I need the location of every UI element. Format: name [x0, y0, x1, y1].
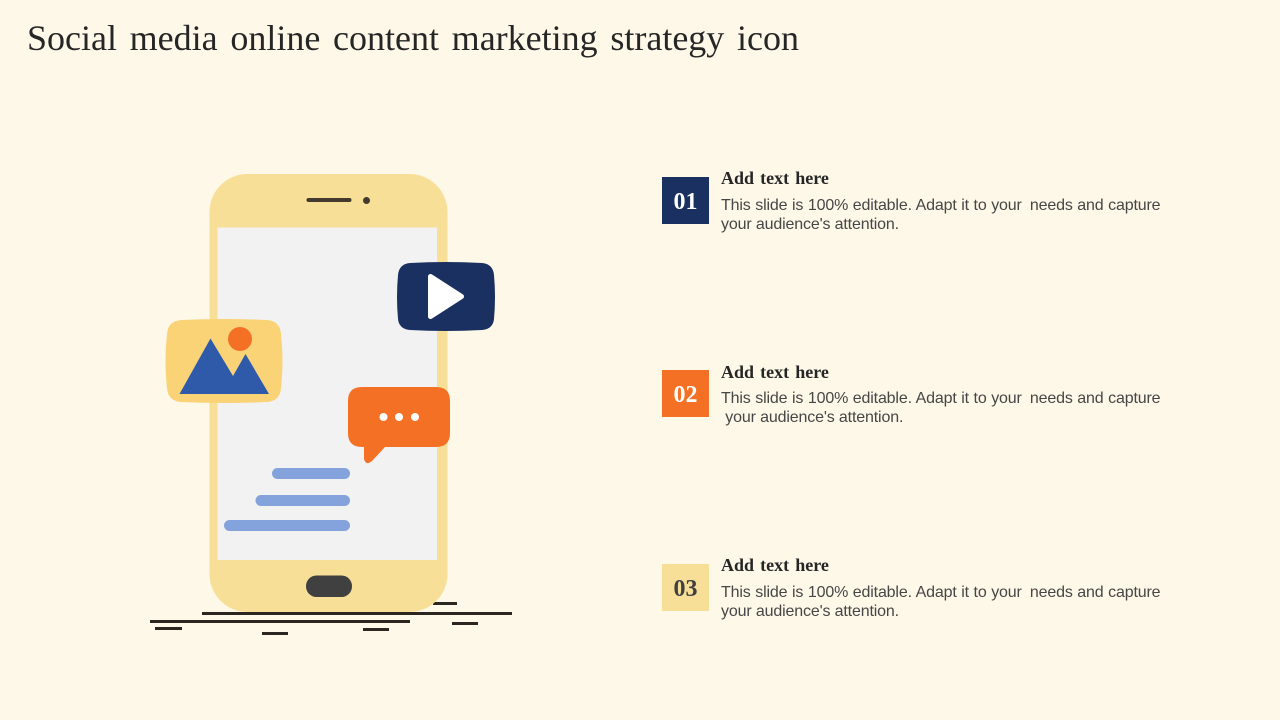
- item 03 body: This slide is 100% editable. Adapt it to your needs and capture: [721, 584, 1160, 601]
- number badge 02: [662, 370, 709, 417]
- item 02 body: This slide is 100% editable. Adapt it to your needs and capture: [721, 390, 1160, 407]
- item 01 body: your audience's attention.: [721, 216, 899, 233]
- number badge 03: 03: [674, 576, 698, 602]
- number badge 03: [662, 564, 709, 611]
- title: Social media online content marketing strategy icon: [27, 18, 799, 58]
- item 02 body: your audience's attention.: [725, 409, 903, 426]
- item 01 body: This slide is 100% editable. Adapt it to your needs and capture: [721, 197, 1160, 214]
- phone body: [210, 174, 448, 612]
- icon: chat speech bubble: [348, 387, 450, 463]
- ground lines: [150, 602, 512, 635]
- item 01 body: [721, 197, 1160, 233]
- item 01: [662, 168, 1160, 233]
- icon: video play button: [397, 262, 495, 331]
- number badge 01: [662, 177, 709, 224]
- item 02 body: [721, 390, 1160, 426]
- number badge 01: 01: [674, 189, 698, 215]
- icon: image picture card: [166, 319, 282, 403]
- item 02 heading: Add text here: [721, 362, 829, 382]
- item 03 body: your audience's attention.: [721, 603, 899, 620]
- phone speaker and camera: [306, 197, 370, 204]
- phone home button: [306, 576, 352, 597]
- item 01 heading: Add text here: [721, 168, 829, 188]
- item 03 body: [721, 584, 1160, 620]
- phone screen: [218, 228, 437, 560]
- item 02: [662, 362, 1160, 426]
- text lines on screen: [224, 468, 350, 531]
- number badge 02: 02: [674, 382, 698, 408]
- item 03: [662, 555, 1160, 620]
- item 03 heading: Add text here: [721, 555, 829, 575]
